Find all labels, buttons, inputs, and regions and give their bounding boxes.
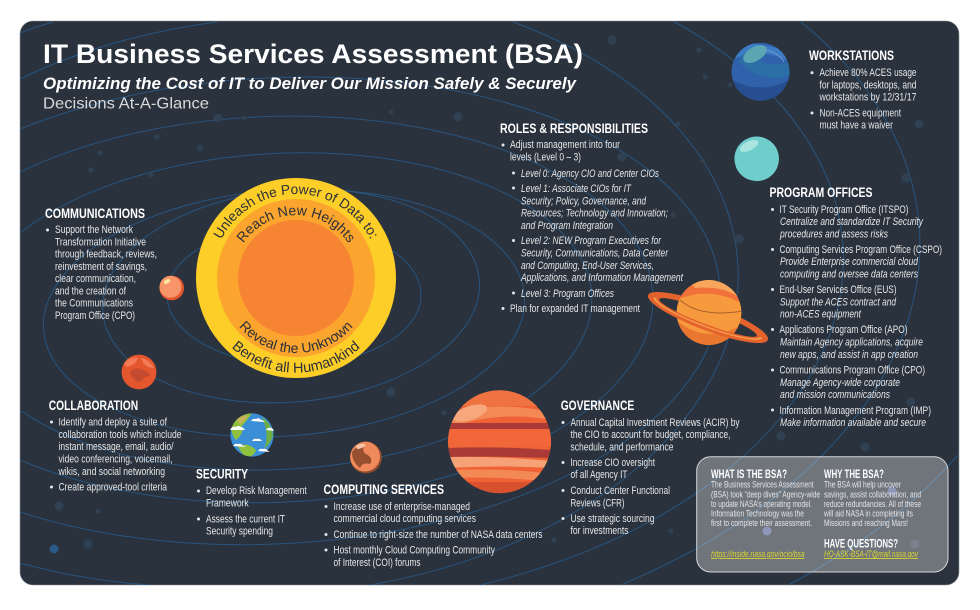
title: IT Business Services Assessment (BSA) <box>43 39 583 69</box>
planet: communications (small orange) <box>159 276 184 300</box>
section: program offices: Centralize and standardize IT Security <box>780 216 924 228</box>
section: workstations: for laptops, desktops, and <box>820 80 917 92</box>
section: communications: clear communication, <box>55 273 136 285</box>
planet: workstations (neptune) <box>732 40 790 102</box>
section: workstations: Achieve 80% ACES usage <box>820 67 917 79</box>
section: roles and responsibilities <box>500 121 684 315</box>
section: security: SECURITY <box>196 467 248 482</box>
section: program offices <box>770 185 942 429</box>
section: roles and responsibilities: ROLES & RESPONSIBILITIES <box>500 121 648 136</box>
callout box: about the BSA <box>697 457 948 572</box>
section: roles and responsibilities: Level 1: Associate CIOs for IT <box>521 183 632 195</box>
section: computing services: commercial cloud computing services <box>334 513 476 525</box>
section: roles and responsibilities: Level 3: Program Offices <box>521 288 615 300</box>
section: governance: Reviews (CFR) <box>570 498 624 510</box>
section: roles and responsibilities: Plan for expanded IT management <box>510 303 640 315</box>
section: governance: Increase CIO oversight <box>570 457 655 469</box>
section: program offices: End-User Services Office (EUS) <box>780 284 896 296</box>
section: governance: Annual Capital Investment Reviews (ACIR) by <box>570 417 740 429</box>
section: program offices: Applications Program Office (APO) <box>780 324 908 336</box>
section: roles and responsibilities: Adjust management into four <box>510 139 620 151</box>
section: communications: Transformation Initiative <box>55 236 146 248</box>
sun with mission text: Reveal the Unknown <box>240 320 352 354</box>
callout box: about the BSA: to update NASA’s operating model. <box>711 499 812 509</box>
section: program offices: Provide Enterprise commercial cloud <box>780 256 919 268</box>
callout box: about the BSA: (BSA) took “deep dives” Agency-wide <box>711 489 820 499</box>
planet: security (earth) <box>230 413 274 457</box>
section: security: Assess the current IT <box>206 514 285 526</box>
section: program offices: Support the ACES contract and <box>780 296 897 308</box>
section: communications: reinvestment of savings, <box>55 261 147 273</box>
callout box: about the BSA: savings, assist collaboration, and <box>824 489 921 499</box>
sun with mission text <box>196 178 396 378</box>
section: roles and responsibilities: Level 2: NEW Program Executives for <box>521 235 661 247</box>
section: collaboration: video conferencing, voicemail, <box>58 454 172 466</box>
section: governance: schedule, and performance <box>570 442 674 454</box>
section: computing services: of Interest (COI) forums <box>334 557 420 569</box>
callout box: about the BSA: WHY THE BSA? <box>824 469 884 481</box>
section: security: Security spending <box>206 526 273 538</box>
sun with mission text: Benefit all Humankind <box>232 340 360 373</box>
callout box: about the BSA: HAVE QUESTIONS? <box>824 539 898 551</box>
section: roles and responsibilities: and Computing, End-User Services, <box>521 260 654 272</box>
section: security: Framework <box>206 498 249 510</box>
section: communications: and the creation of <box>55 285 126 297</box>
section: program offices: procedures and assess risks <box>779 228 889 240</box>
section: program offices: Maintain Agency applications, acquire <box>780 336 923 348</box>
section: collaboration: Create approved-tool criteria <box>58 482 167 494</box>
planet: computing services (small mars) <box>350 442 382 474</box>
section: governance: GOVERNANCE <box>561 398 634 413</box>
section: roles and responsibilities: Applications, and Information Management <box>520 272 684 284</box>
section: program offices: PROGRAM OFFICES <box>770 185 872 200</box>
section: communications: the Communications <box>55 298 133 310</box>
section: program offices: Communications Program Office (CPO) <box>780 364 925 376</box>
section: collaboration: instant message, email, audio/ <box>58 441 174 453</box>
callout box: about the BSA: HQ-ASK-BSA-IT@mail.nasa.gov <box>824 549 918 559</box>
callout box: about the BSA: Missions and reaching Mars! <box>824 518 908 528</box>
callout box: about the BSA: Information Technology was the <box>711 508 804 518</box>
section: workstations: workstations by 12/31/17 <box>819 92 917 104</box>
section: computing services: Continue to right-size the number of NASA data centers <box>334 529 542 541</box>
section: program offices: non-ACES equipment <box>780 308 862 320</box>
sun with mission text: Unleash the Power of Data to: <box>213 184 377 239</box>
section: governance: Use strategic sourcing <box>570 513 655 525</box>
section: communications: Program Office (CPO) <box>55 310 135 322</box>
section: roles and responsibilities: Security, Communications, Data Center <box>521 248 668 260</box>
section: workstations: must have a waiver <box>820 120 893 132</box>
section: governance <box>561 398 740 537</box>
section: collaboration: Identify and deploy a suite of <box>58 416 167 428</box>
section: communications: COMMUNICATIONS <box>45 206 145 221</box>
section: roles and responsibilities: Level 0: Agency CIO and Center CIOs <box>521 168 660 180</box>
sun with mission text: Reach New Heights <box>236 206 354 242</box>
section: computing services: Increase use of enterprise-managed <box>334 501 470 513</box>
section: collaboration: COLLABORATION <box>49 398 138 413</box>
section: collaboration: wikis, and social networking <box>58 466 165 478</box>
section: computing services <box>324 482 542 569</box>
section: roles and responsibilities: Resources; Technology and Innovation; <box>521 208 668 220</box>
section: program offices: Make information available and secure <box>780 417 926 429</box>
section: program offices: Manage Agency-wide corporate <box>780 377 900 389</box>
section: roles and responsibilities: Security; Policy, Governance, and <box>521 195 647 207</box>
planet: program offices (teal) <box>734 136 779 181</box>
callout box: about the BSA: WHAT IS THE BSA? <box>711 469 787 481</box>
section: communications: Support the Network <box>55 224 134 236</box>
callout box: about the BSA: first to complete their assessment. <box>711 518 812 528</box>
section: governance: the CIO to account for budget, compliance, <box>570 429 730 441</box>
section: workstations <box>809 48 917 132</box>
section: communications <box>45 206 157 322</box>
section: computing services: Host monthly Cloud Computing Community <box>334 544 496 556</box>
section: collaboration <box>49 398 182 494</box>
section: program offices: and mission communications <box>780 389 891 401</box>
section: program offices: computing and oversee data centers <box>780 268 919 280</box>
planet: governance (jupiter) <box>448 390 551 494</box>
section: collaboration: collaboration tools which include <box>58 429 182 441</box>
section: governance: for investments <box>570 525 628 537</box>
callout box: about the BSA: will aid NASA in completing its <box>823 508 913 518</box>
section: roles and responsibilities: and Program Integration <box>521 220 613 232</box>
section: program offices: new apps, and assist in app creation <box>780 349 918 361</box>
planet: collaboration (red) <box>122 354 156 390</box>
section: program offices: IT Security Program Office (ITSPO) <box>780 204 908 216</box>
section: security <box>196 467 307 538</box>
section: roles and responsibilities: levels (Level 0 – 3) <box>510 151 581 163</box>
section: security: Develop Risk Management <box>206 485 307 497</box>
tagline: Decisions At-A-Glance <box>43 96 209 112</box>
callout box: about the BSA: The Business Services Assessment <box>711 480 814 490</box>
background stars <box>50 36 924 554</box>
section: governance: of all Agency IT <box>570 469 628 481</box>
callout box: about the BSA: reduce redundancies. All of these <box>824 499 921 509</box>
section: communications: through feedback, reviews, <box>55 248 157 260</box>
callout box: about the BSA: https://inside.nasa.gov/ocio/bsa <box>711 549 805 559</box>
subtitle: Optimizing the Cost of IT to Deliver Our Mission Safely & Securely <box>43 74 578 93</box>
section: governance: Conduct Center Functional <box>570 485 670 497</box>
section: computing services: COMPUTING SERVICES <box>324 482 444 497</box>
section: program offices: Information Management Program (IMP) <box>780 405 931 417</box>
callout box: about the BSA: The BSA will help uncover <box>824 480 901 490</box>
section: workstations: Non-ACES equipment <box>820 108 901 120</box>
planet: roles and responsibilities (saturn) <box>648 280 768 345</box>
section: workstations: WORKSTATIONS <box>809 48 894 63</box>
